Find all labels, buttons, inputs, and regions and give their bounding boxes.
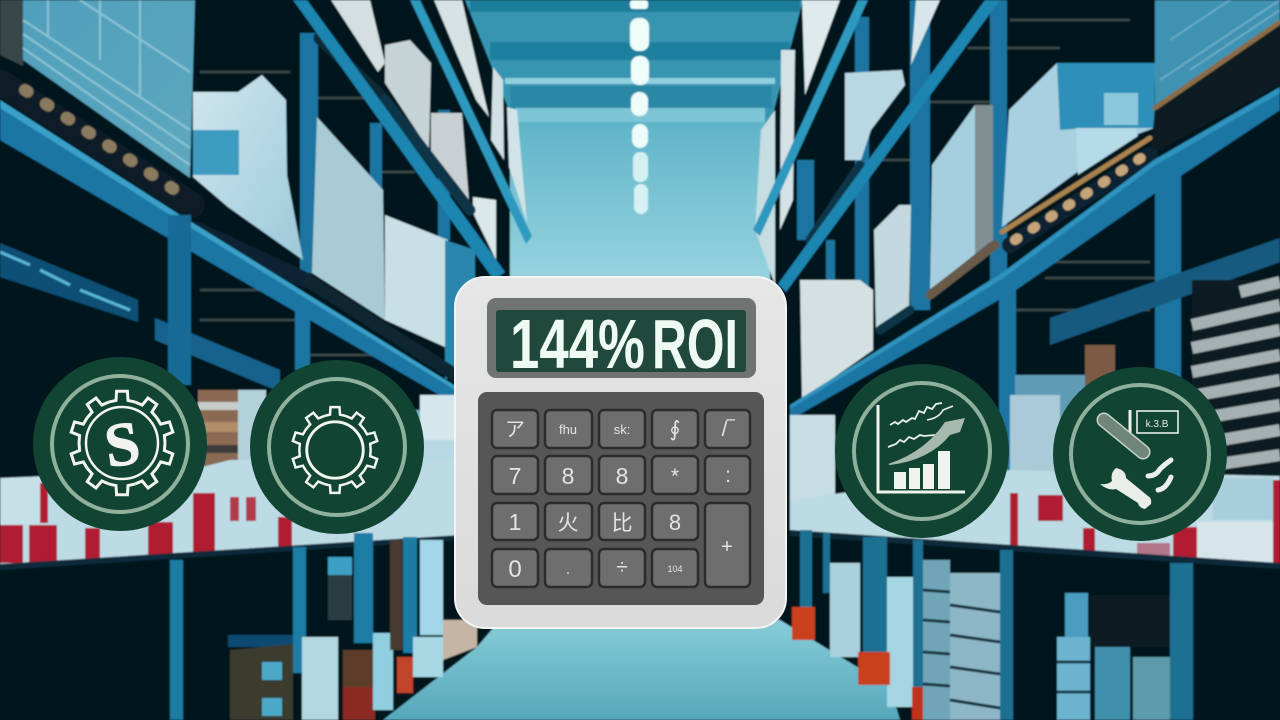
display screen bbox=[496, 310, 746, 372]
icon badge: growth chart bbox=[835, 364, 1009, 538]
left upper uprights bbox=[295, 33, 450, 370]
key labels: ∮ bbox=[670, 418, 680, 441]
key labels: 104 bbox=[667, 564, 683, 574]
icon badge: dollar gear bbox=[33, 357, 207, 531]
calculator bbox=[455, 277, 786, 628]
keypad bbox=[478, 392, 764, 605]
ceiling lights bbox=[630, 0, 649, 214]
right white and red shelf row bbox=[790, 470, 1280, 569]
icon: blueprint and tools: k.3.B bbox=[1146, 419, 1169, 430]
key labels: 1 bbox=[509, 509, 521, 535]
display bezel bbox=[487, 298, 756, 378]
display text: 144% ROI: 144% bbox=[510, 305, 645, 383]
keypad keys bbox=[492, 410, 750, 587]
faint shelf lines in the dark gaps bbox=[200, 20, 1155, 355]
left upper boxes bbox=[0, 0, 527, 380]
left pallet wrap lines bbox=[23, 0, 190, 165]
display text: 144% ROI: ROI bbox=[652, 305, 738, 383]
icon: gear with dollar sign bbox=[69, 391, 175, 495]
key labels: 7 bbox=[509, 463, 521, 489]
calculator body bbox=[455, 277, 786, 628]
right steel beams bbox=[753, 0, 1280, 420]
key labels: ア bbox=[505, 419, 525, 441]
right lower uprights bbox=[800, 530, 1193, 720]
icon: gear bbox=[291, 407, 379, 493]
key labels: : bbox=[725, 464, 731, 487]
left steel beams bbox=[0, 0, 532, 404]
ceiling bbox=[465, 0, 803, 125]
key labels: 8 bbox=[562, 463, 574, 489]
icon badge: gear bbox=[250, 360, 424, 534]
key labels: + bbox=[721, 536, 733, 558]
icon: bar chart with rising arrow bbox=[878, 403, 965, 492]
left pallets bbox=[0, 38, 470, 375]
left lower uprights bbox=[170, 533, 417, 720]
floor bbox=[383, 620, 900, 720]
left shelving bbox=[0, 0, 532, 720]
key labels: 8 bbox=[669, 510, 681, 535]
right pallet wrap lines bbox=[1160, 0, 1280, 80]
key labels: 8 bbox=[616, 463, 628, 489]
right pallets bbox=[810, 22, 1280, 330]
right shelving bbox=[753, 0, 1280, 720]
key labels: . bbox=[566, 561, 570, 578]
right upper boxes bbox=[755, 0, 1280, 400]
right striped carton stacks bbox=[790, 280, 1280, 505]
icon badge: tools bbox=[1053, 367, 1227, 541]
left stacked cartons bbox=[198, 390, 456, 490]
key labels: 火 bbox=[558, 512, 578, 535]
back wall bbox=[510, 122, 770, 322]
key labels: ÷ bbox=[616, 556, 628, 579]
icon: blueprint and tools bbox=[1100, 410, 1178, 509]
left white and red shelf row bbox=[0, 460, 460, 570]
icon: gear with dollar sign: S bbox=[100, 409, 144, 481]
key labels: * bbox=[671, 465, 679, 488]
key labels bbox=[505, 418, 735, 583]
right lower boxes bbox=[792, 560, 1170, 720]
key labels: 比 bbox=[612, 512, 632, 535]
right upper uprights bbox=[797, 0, 1181, 477]
key labels: 0 bbox=[508, 556, 522, 583]
key labels: sk: bbox=[614, 422, 630, 437]
key labels: /‾ bbox=[722, 418, 735, 441]
key labels: fhu bbox=[559, 422, 577, 437]
left lower boxes bbox=[228, 540, 477, 720]
